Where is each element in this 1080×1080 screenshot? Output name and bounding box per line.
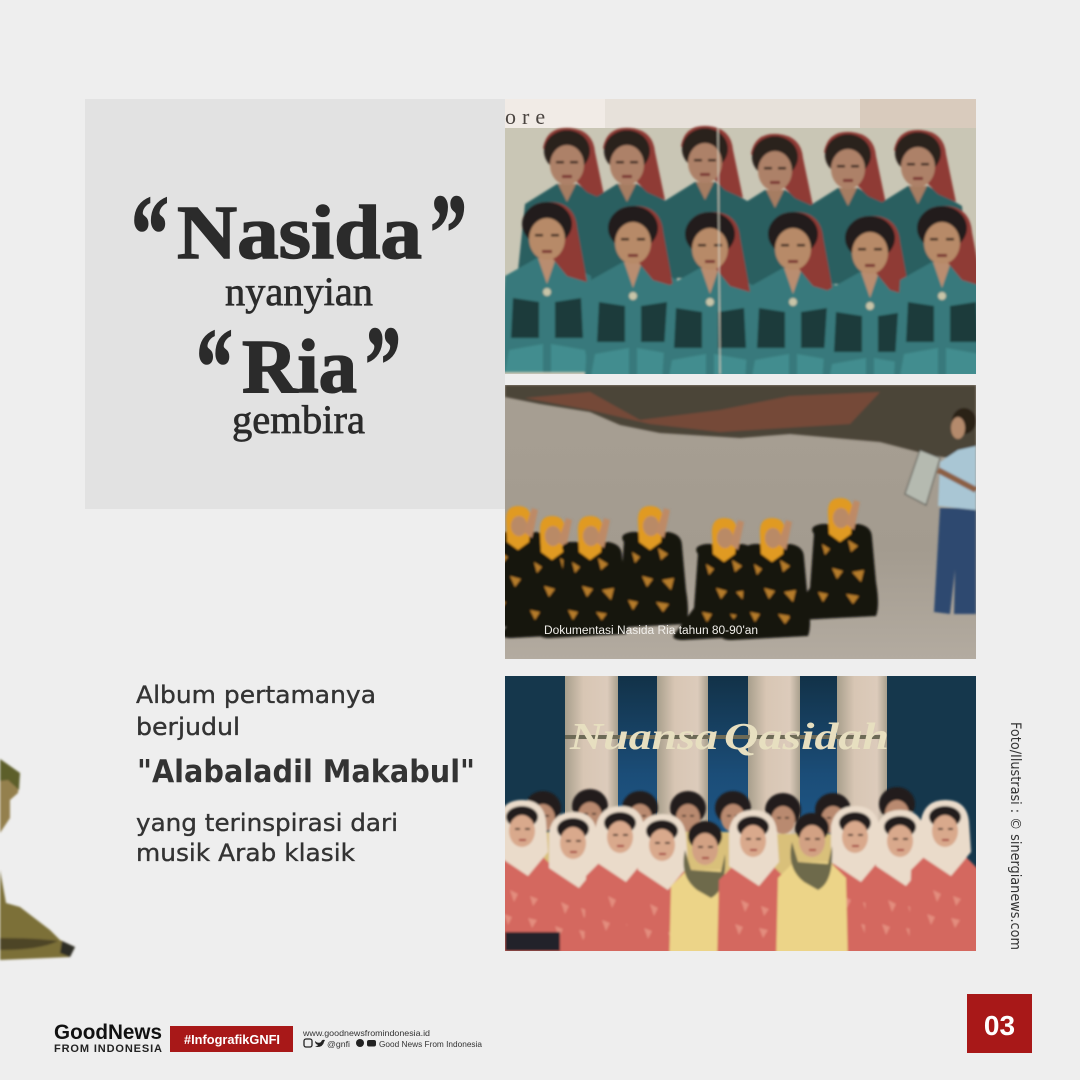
page number badge — [967, 994, 1032, 1053]
heading: Nasida: Nasida — [177, 191, 422, 275]
clipped magazine text: ore — [505, 104, 551, 129]
heading: Ria: ” — [365, 304, 401, 426]
heading: Ria — [196, 304, 401, 428]
icon: twitter — [315, 1040, 325, 1047]
dancers row — [467, 498, 878, 640]
photo credit: Foto/Ilustrasi : © sinergianews.com — [1007, 722, 1023, 950]
website and social handles: www.goodnewsfromindonesia.id — [302, 1028, 430, 1038]
icon: facebook — [356, 1039, 364, 1047]
title panel — [85, 99, 505, 509]
text block: album description: yang terinspirasi dari — [136, 809, 398, 837]
hashtag badge — [170, 1026, 293, 1052]
stage sign — [565, 722, 886, 756]
website and social handles: Good News From Indonesia — [379, 1039, 482, 1049]
subheading: gembira: gembira — [232, 397, 365, 442]
text block: album description: berjudul — [136, 713, 240, 741]
text block: album description — [136, 681, 475, 867]
photo: dancers on sand dunes — [467, 385, 976, 659]
logo: GoodNews From Indonesia: GoodNews — [54, 1021, 162, 1044]
website and social handles — [302, 1028, 482, 1049]
subheading: nyanyian: nyanyian — [225, 269, 373, 314]
logo: GoodNews From Indonesia — [54, 1021, 162, 1055]
icon: youtube — [367, 1040, 376, 1046]
text block: album description: musik Arab klasik — [136, 839, 355, 867]
photo caption: Dokumentasi Nasida Ria tahun 80-90'an — [544, 625, 758, 637]
hills — [505, 385, 976, 462]
icon: instagram — [304, 1039, 312, 1047]
text block: album description: Album pertamanya — [136, 681, 376, 709]
page number badge: 03 — [984, 1010, 1015, 1041]
photo: group in teal kebaya — [499, 99, 990, 386]
presenter — [905, 408, 976, 614]
website and social handles: @gnfi — [327, 1039, 350, 1049]
singers — [505, 786, 976, 951]
stage sign: Nuansa — [569, 716, 718, 758]
stage sign: Qasidah — [724, 716, 889, 758]
logo: GoodNews From Indonesia: FROM INDONESIA — [54, 1043, 162, 1055]
heading: Nasida — [131, 172, 467, 295]
decorative figure at left edge — [0, 759, 75, 960]
hashtag badge: #InfografikGNFI — [184, 1033, 280, 1047]
heading: Ria: “ — [196, 306, 233, 428]
album title: "Alabaladil Makabul" — [137, 754, 475, 790]
heading: Ria: Ria — [242, 325, 357, 409]
heading: Nasida: ” — [430, 172, 467, 294]
photo: Nuansa Qasidah stage group — [505, 676, 976, 951]
heading: Nasida: “ — [131, 173, 169, 295]
